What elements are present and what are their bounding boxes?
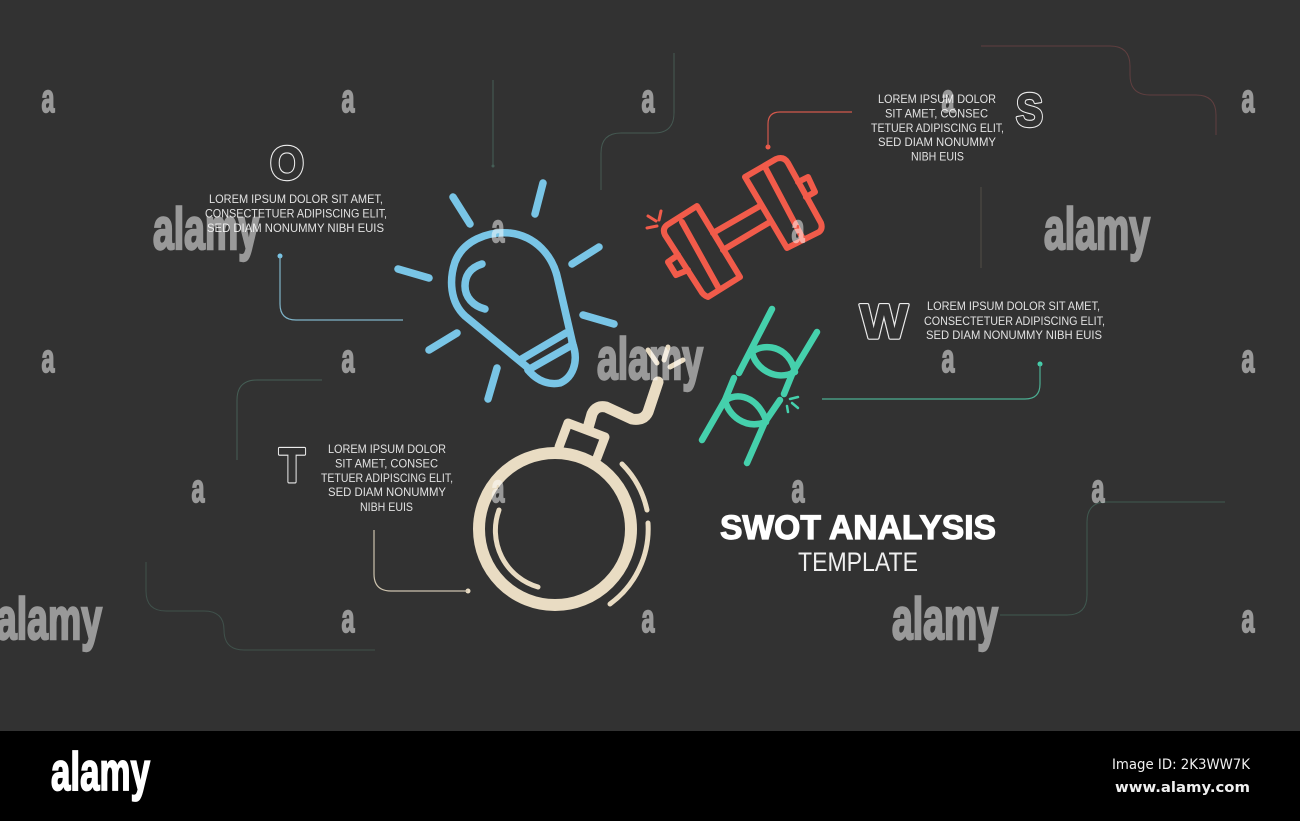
watermark overlay: alamy [1044, 197, 1150, 262]
watermark overlay: a [1092, 467, 1105, 511]
footer image id and url: www.alamy.com [1115, 780, 1250, 796]
letter W: W [860, 296, 909, 349]
watermark overlay: a [1242, 337, 1255, 381]
text block: weaknesses: SED DIAM NONUMMY NIBH EUIS [926, 328, 1102, 342]
text block: threats: SIT AMET, CONSEC [335, 456, 438, 470]
watermark overlay: a [492, 467, 505, 511]
watermark overlay: a [1242, 77, 1255, 121]
text block: weaknesses: LOREM IPSUM DOLOR SIT AMET, [927, 299, 1100, 313]
title: TEMPLATE [798, 547, 918, 577]
text block: threats: NIBH EUIS [360, 500, 413, 514]
text block: threats: TETUER ADIPISCING ELIT, [321, 471, 453, 485]
watermark overlay: a [792, 207, 805, 251]
letter O: O [270, 137, 304, 189]
text block: strengths: LOREM IPSUM DOLOR [878, 92, 996, 106]
watermark overlay: alamy [892, 587, 998, 652]
letter T: T [279, 440, 305, 493]
footer image id and url [1112, 757, 1251, 796]
footer band [0, 731, 1300, 821]
watermark overlay: a [492, 207, 505, 251]
letter T: T [279, 440, 305, 493]
text block: weaknesses [924, 299, 1105, 342]
text block: strengths: SED DIAM NONUMMY [878, 135, 996, 149]
text block: threats: LOREM IPSUM DOLOR [328, 442, 446, 456]
watermark overlay: a [342, 337, 355, 381]
text block: weaknesses: CONSECTETUER ADIPISCING ELIT, [924, 314, 1105, 328]
connector: weaknesses [822, 362, 1042, 399]
icon: bomb (threats) [479, 347, 683, 605]
icon: light bulb (opportunities) [398, 183, 614, 399]
text block: strengths: SIT AMET, CONSEC [885, 106, 988, 120]
text block: threats [321, 442, 453, 514]
watermark overlay: a [642, 77, 655, 121]
text block: strengths: NIBH EUIS [911, 150, 964, 164]
watermark overlay: a [342, 597, 355, 641]
watermark overlay: a [642, 597, 655, 641]
letter S: S [1016, 84, 1043, 136]
watermark overlay: alamy [597, 327, 703, 392]
watermark overlay: a [42, 337, 55, 381]
text block: opportunities: SED DIAM NONUMMY NIBH EUIS [207, 221, 384, 235]
icon: broken chain (weaknesses) [702, 309, 817, 463]
watermark overlay: a [192, 467, 205, 511]
text block: opportunities: LOREM IPSUM DOLOR SIT AMET, [209, 192, 383, 206]
icon: dumbbell (strengths) [647, 158, 822, 297]
text block: opportunities: CONSECTETUER ADIPISCING ELIT, [205, 206, 387, 220]
watermark overlay: a [792, 467, 805, 511]
title [720, 509, 996, 577]
text block: opportunities [205, 192, 387, 235]
letter S: S [1016, 84, 1043, 136]
text block: strengths: TETUER ADIPISCING ELIT, [871, 121, 1004, 135]
connector: opportunities [278, 254, 403, 320]
watermark overlay: a [942, 337, 955, 381]
letter O: O [270, 137, 304, 189]
connector: strengths [766, 112, 852, 150]
watermark overlay [0, 77, 1255, 652]
footer logo: alamy [51, 742, 150, 802]
watermark overlay: a [342, 77, 355, 121]
text block: threats: SED DIAM NONUMMY [328, 485, 446, 499]
watermark overlay: alamy [153, 197, 259, 262]
footer image id and url: Image ID: 2K3WW7K [1112, 757, 1251, 773]
watermark overlay: a [1242, 597, 1255, 641]
watermark overlay: a [42, 77, 55, 121]
watermark overlay: a [942, 77, 955, 121]
title: SWOT ANALYSIS [720, 509, 996, 547]
letter W: W [860, 296, 909, 349]
connector: threats [374, 530, 470, 594]
watermark overlay: alamy [0, 587, 102, 652]
text block: strengths [871, 92, 1004, 164]
